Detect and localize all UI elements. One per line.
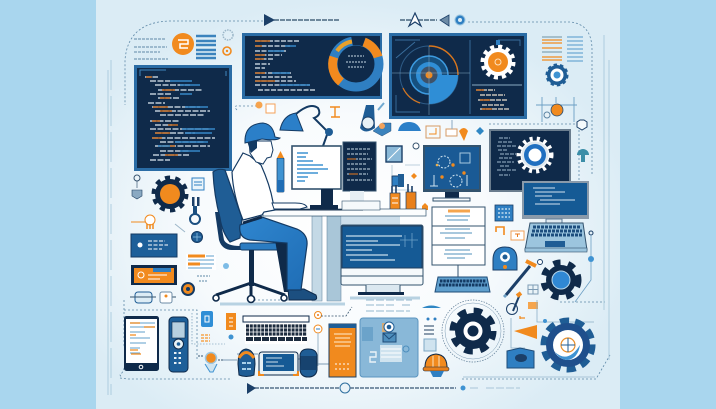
dashed frame [120, 21, 610, 379]
arm [272, 203, 307, 209]
chair arm and seat [215, 212, 281, 250]
orange card [131, 265, 177, 285]
lock [493, 247, 517, 270]
hair [247, 141, 257, 153]
back leg [275, 240, 290, 292]
orange flag and envelope [507, 300, 594, 368]
blue card [131, 234, 177, 257]
light bulb [360, 103, 384, 132]
tablet [124, 316, 159, 371]
pen and wrench [504, 260, 542, 314]
orange tag icons [496, 227, 594, 302]
trousers [240, 217, 307, 290]
belt [243, 217, 262, 223]
bulb bottom [198, 352, 224, 372]
desk [220, 209, 426, 304]
gear orange left [154, 178, 186, 210]
small left icons [130, 232, 229, 303]
globe gear [544, 321, 592, 369]
stacked document [432, 207, 485, 277]
panel: code and donut [242, 33, 382, 99]
blue dashboard panel [360, 318, 418, 377]
mid monitor [423, 145, 481, 201]
top connector [264, 13, 465, 26]
neck and face [249, 141, 273, 164]
icons left of mid monitor [386, 143, 420, 190]
keyboard under document [435, 277, 490, 292]
central background [96, 0, 620, 409]
panel: code left [134, 65, 232, 171]
chair back [213, 169, 242, 242]
keyboard white [243, 316, 309, 344]
hard hat [245, 123, 280, 143]
seat cushion [240, 243, 282, 250]
blue chip [495, 205, 513, 221]
gear dark small [544, 263, 578, 297]
lamp [256, 102, 340, 146]
remote [169, 317, 188, 372]
horizontal lists middle [366, 300, 441, 351]
desk items [390, 184, 428, 211]
shirt [232, 153, 275, 220]
connector icons [314, 307, 352, 366]
lists and gear top right [542, 37, 583, 85]
pencil holder [277, 151, 284, 192]
big gear with ring [442, 300, 504, 362]
chair base [213, 250, 287, 302]
small icons beside gear [131, 175, 204, 232]
hard hat orange [423, 354, 449, 377]
outer frame lines [108, 35, 609, 395]
white monitor [292, 146, 341, 209]
bulb and bracket right [536, 97, 589, 162]
dark monitor [342, 142, 380, 210]
small top centre icons [373, 120, 484, 141]
shoes [288, 289, 317, 300]
person [213, 123, 317, 300]
device row [223, 349, 331, 377]
logo and list top left [134, 30, 233, 59]
dark monitor with gear [489, 129, 571, 192]
bottom connector [247, 377, 595, 394]
laptop [522, 181, 589, 252]
panel: radar and gear [389, 33, 527, 119]
orange document [329, 324, 356, 377]
lower monitor [341, 225, 423, 295]
blue tags [192, 311, 236, 344]
